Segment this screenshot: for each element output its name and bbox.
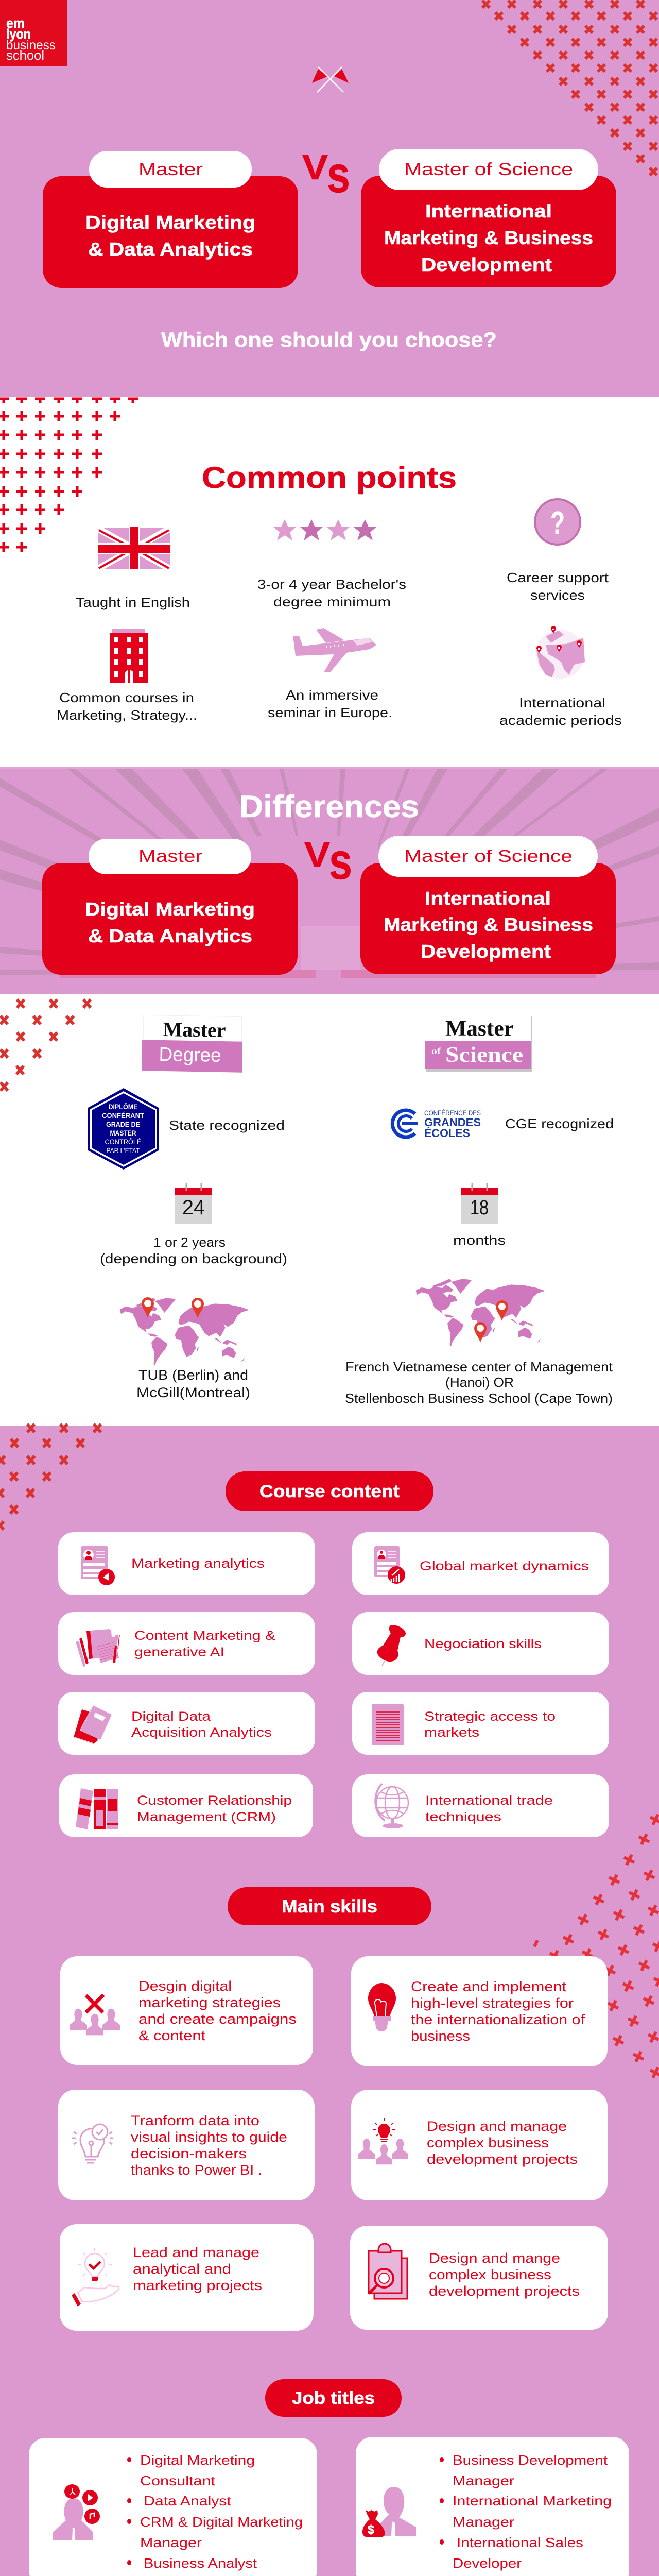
badge: Master of Science — [425, 1014, 532, 1072]
badge: state recognized hexagon: CONTRÔLÉ — [105, 1138, 141, 1146]
card: create and implement: Create and implement — [411, 1979, 567, 1994]
card: transform data: decision-makers — [131, 2146, 247, 2161]
text: duration master: (depending on background) — [100, 1251, 287, 1266]
card: design digital marketing: Desgin digital — [138, 1978, 232, 1994]
item: international academic periods: International — [519, 695, 605, 710]
item: common courses — [57, 629, 197, 723]
card: lead and manage: Lead and manage — [133, 2245, 259, 2260]
item: career support: Career support — [507, 570, 609, 585]
card: global market dynamics: Global market dynamics — [420, 1559, 589, 1573]
item: immersive seminar: seminar in Europe. — [268, 705, 392, 720]
section: main skills — [58, 1887, 608, 2331]
badge: Master of Science: Science — [445, 1043, 523, 1067]
icon: calendar 18 — [461, 1183, 498, 1224]
pill: job titles: Job titles — [292, 2388, 375, 2408]
badge: Master Degree: Master — [163, 1018, 226, 1042]
card: Master of Science International Marketing: Development — [421, 941, 551, 962]
logo: conférence des grandes écoles — [392, 1109, 481, 1140]
icon: calendar 24 — [175, 1183, 212, 1224]
logo: emlyon top — [0, 0, 67, 66]
icon: calendar 18: 18 — [470, 1196, 489, 1219]
icon: calendar 24: 24 — [182, 1196, 205, 1219]
map: Hanoi and Cape Town — [415, 1279, 545, 1346]
panel: course, skills, jobs and contact background — [0, 1424, 659, 2576]
badge: Master of Science: Master — [445, 1017, 514, 1041]
card: complex business development 1 — [351, 2090, 608, 2200]
badge: Master of Science: of — [431, 1046, 441, 1056]
card: Master of Science International Marketing: Development — [421, 254, 552, 275]
text: duration master: 1 or 2 years — [153, 1234, 226, 1250]
card: content marketing: generative AI — [134, 1645, 224, 1659]
heading: common points: Common points — [202, 461, 457, 495]
text: partner universities MSc: (Hanoi) OR — [445, 1375, 514, 1390]
badge: state recognized hexagon — [88, 1088, 159, 1170]
card: master job titles: CRM & Digital Marketing — [140, 2514, 303, 2530]
logo: conférence des grandes écoles: CONFÉRENCE DES — [424, 1109, 481, 1117]
card: negociation skills: Negociation skills — [424, 1637, 542, 1651]
card: marketing analytics: Marketing analytics — [131, 1556, 265, 1571]
card: complex business development 2: development projects — [429, 2283, 580, 2299]
card: complex business development 1: development projects — [427, 2151, 578, 2167]
subtitle: which one: Which one should you choose? — [161, 329, 497, 351]
logo: conférence des grandes écoles: GRANDES — [424, 1116, 481, 1129]
card: MSc job titles: Business Development — [453, 2452, 608, 2468]
card: transform data: visual insights to guide — [131, 2129, 287, 2145]
item: career support: ? — [550, 505, 565, 541]
icon: crossed flags — [312, 67, 349, 92]
card: MSc job titles: Manager — [453, 2473, 514, 2488]
pattern: red plus signs — [0, 398, 138, 552]
card: strategic access to markets: markets — [424, 1725, 479, 1740]
card: transform data: thanks to Power BI . — [131, 2162, 262, 2178]
card: MSc job titles: International Sales — [457, 2535, 583, 2550]
card: Master Digital Marketing — [43, 151, 298, 288]
badge: state recognized hexagon: PAR L'ÉTAT — [106, 1146, 140, 1155]
card: complex business development 2 — [350, 2226, 608, 2330]
card: MSc job titles — [356, 2437, 629, 2576]
item: international academic periods — [499, 626, 622, 728]
card: digital data acquisition: Acquisition Analytics — [131, 1725, 272, 1740]
card: MSc job titles: $ — [368, 2523, 375, 2537]
card: marketing analytics — [58, 1532, 315, 1595]
text: partner universities master: McGill(Montreal) — [136, 1385, 250, 1400]
text: state recognized: State recognized — [169, 1117, 285, 1133]
card: master job titles: Business Analyst — [144, 2555, 257, 2571]
card: design digital marketing — [60, 1956, 313, 2065]
card: negociation skills — [352, 1612, 609, 1675]
card: transform data: Tranform data into — [131, 2113, 259, 2128]
text: CGE recognized: CGE recognized — [505, 1116, 614, 1131]
badge: state recognized hexagon: DIPLÔME — [108, 1102, 138, 1111]
item: career support: services — [530, 587, 585, 603]
card: Master of Science International Marketing: Master of Science — [404, 160, 573, 179]
text: duration master — [100, 1234, 287, 1266]
card: Master Digital Marketing: Digital Marketing — [85, 899, 255, 920]
label: Vs: V — [304, 835, 330, 874]
pill: main skills — [228, 1887, 431, 1925]
panel: comparison details — [0, 994, 659, 1426]
card: master job titles — [29, 2438, 317, 2576]
logo: emlyon top: school — [6, 47, 44, 63]
pattern: red crosses top right — [482, 1, 657, 175]
map: Berlin and Montreal — [119, 1297, 249, 1365]
card: strategic access to markets: Strategic access to — [424, 1709, 556, 1724]
card: complex business development 2: Design and mange — [429, 2250, 560, 2266]
card: customer relationship management: Management (CRM) — [137, 1810, 276, 1824]
pattern: red crosses course section — [0, 1424, 101, 1530]
card: create and implement: high-level strategies for — [411, 1995, 574, 2011]
logo: emlyon top: business — [6, 37, 56, 53]
card: digital data acquisition — [58, 1692, 315, 1755]
card: international trade techniques: techniques — [425, 1810, 501, 1824]
section: job titles — [29, 2379, 629, 2576]
card: design digital marketing: marketing strategies — [138, 1995, 281, 2010]
logo: conférence des grandes écoles: ÉCOLES — [424, 1127, 470, 1140]
label: Vs: V — [302, 148, 328, 187]
card: digital data acquisition: Digital Data — [131, 1709, 211, 1724]
pill: main skills: Main skills — [282, 1896, 377, 1917]
card: master job titles: Consultant — [140, 2473, 216, 2488]
card: international trade techniques: International trade — [425, 1793, 553, 1808]
item: immersive seminar — [268, 628, 392, 720]
panel: hero header — [0, 0, 659, 397]
card: MSc job titles: International Marketing — [453, 2493, 612, 2509]
card: complex business development 1: complex business — [427, 2135, 549, 2150]
pill: job titles — [265, 2379, 402, 2417]
badge: state recognized hexagon: GRADE DE — [106, 1120, 140, 1128]
card: Master of Science International Marketing: International — [425, 200, 552, 222]
item: career support — [507, 499, 609, 603]
badge: Master Degree — [142, 1015, 243, 1073]
card: complex business development 2: complex business — [429, 2267, 551, 2282]
item: common courses: Marketing, Strategy... — [57, 707, 197, 723]
text: partner universities MSc — [345, 1359, 613, 1406]
card: global market dynamics — [352, 1532, 609, 1595]
heading: differences: Differences — [239, 789, 419, 824]
card: lead and manage — [60, 2224, 314, 2331]
card: MSc job titles: Developer — [453, 2555, 522, 2571]
card: strategic access to markets — [352, 1692, 609, 1755]
card: Master of Science International Marketing: Marketing & Business — [384, 227, 593, 248]
card: Master Digital Marketing: Master — [138, 846, 202, 866]
card: Master of Science International Marketing — [361, 149, 616, 287]
card: content marketing — [58, 1612, 315, 1675]
card: master job titles: Data Analyst — [144, 2493, 232, 2509]
card: create and implement: the internationalization of — [411, 2012, 585, 2027]
card: create and implement: business — [411, 2028, 470, 2044]
card: Master Digital Marketing: & Data Analytics — [88, 925, 252, 946]
card: customer relationship management: Customer Relationship — [137, 1793, 292, 1808]
card: lead and manage: analytical and — [133, 2261, 231, 2277]
pattern: sunburst rays — [0, 769, 659, 975]
item: bachelor degree: degree minimum — [273, 594, 391, 609]
panel: differences banner — [0, 767, 659, 994]
card: international trade techniques — [352, 1774, 609, 1837]
pill: course content: Course content — [259, 1482, 400, 1501]
card: Master of Science International Marketing: International — [425, 888, 551, 909]
item: taught in English: Taught in English — [76, 595, 190, 610]
card: create and implement — [351, 1956, 608, 2066]
card: MSc job titles: Manager — [453, 2514, 514, 2530]
panel: common points — [0, 397, 659, 767]
pattern: red crosses right side — [534, 1815, 659, 2078]
card: master job titles: Digital Marketing — [140, 2452, 255, 2468]
badge: state recognized hexagon: MASTER — [110, 1129, 136, 1137]
item: taught in English — [76, 527, 190, 610]
text: months: months — [453, 1232, 506, 1248]
card: Master of Science International Marketing: Master of Science — [404, 846, 573, 866]
text: partner universities master — [136, 1367, 250, 1400]
pattern: red crosses left — [1, 999, 91, 1091]
pill: course content — [226, 1471, 433, 1511]
card: Master Digital Marketing: & Data Analytics — [88, 239, 253, 260]
label: Vs: s — [327, 146, 350, 204]
card: design digital marketing: & content — [138, 2028, 206, 2043]
label: Vs — [302, 146, 350, 204]
card: design digital marketing: and create campaigns — [138, 2011, 297, 2027]
logo: emlyon top: lyon — [6, 26, 31, 42]
badge: state recognized hexagon: CONFÉRANT — [102, 1111, 144, 1120]
card: complex business development 1: Design and manage — [427, 2119, 567, 2134]
label: Vs — [304, 833, 352, 890]
text: partner universities MSc: Stellenbosch Business School (Cape Town) — [345, 1391, 613, 1406]
card: Master of Science International Marketing — [360, 836, 616, 974]
card: Master of Science International Marketing: Marketing & Business — [384, 914, 593, 935]
item: common courses: Common courses in — [59, 690, 194, 705]
card: transform data — [58, 2090, 315, 2200]
card: Master Digital Marketing: Master — [138, 160, 203, 179]
logo: emlyon top: em — [6, 15, 25, 31]
item: international academic periods: academic periods — [499, 713, 622, 728]
card: Master Digital Marketing: Digital Marketing — [85, 212, 255, 233]
card: content marketing: Content Marketing & — [134, 1629, 275, 1643]
section: course content — [58, 1471, 609, 1837]
text: partner universities master: TUB (Berlin) and — [138, 1367, 248, 1383]
item: immersive seminar: An immersive — [286, 687, 378, 703]
item: bachelor degree — [257, 519, 406, 609]
label: Vs: s — [329, 833, 352, 890]
item: bachelor degree: 3-or 4 year Bachelor's — [257, 577, 406, 592]
card: Master Digital Marketing — [42, 839, 298, 975]
card: master job titles: Manager — [140, 2535, 202, 2550]
card: lead and manage: marketing projects — [133, 2278, 262, 2293]
card: customer relationship management — [59, 1774, 313, 1837]
text: partner universities MSc: French Vietnamese center of Management — [345, 1359, 613, 1375]
badge: Master Degree: Degree — [159, 1044, 221, 1066]
